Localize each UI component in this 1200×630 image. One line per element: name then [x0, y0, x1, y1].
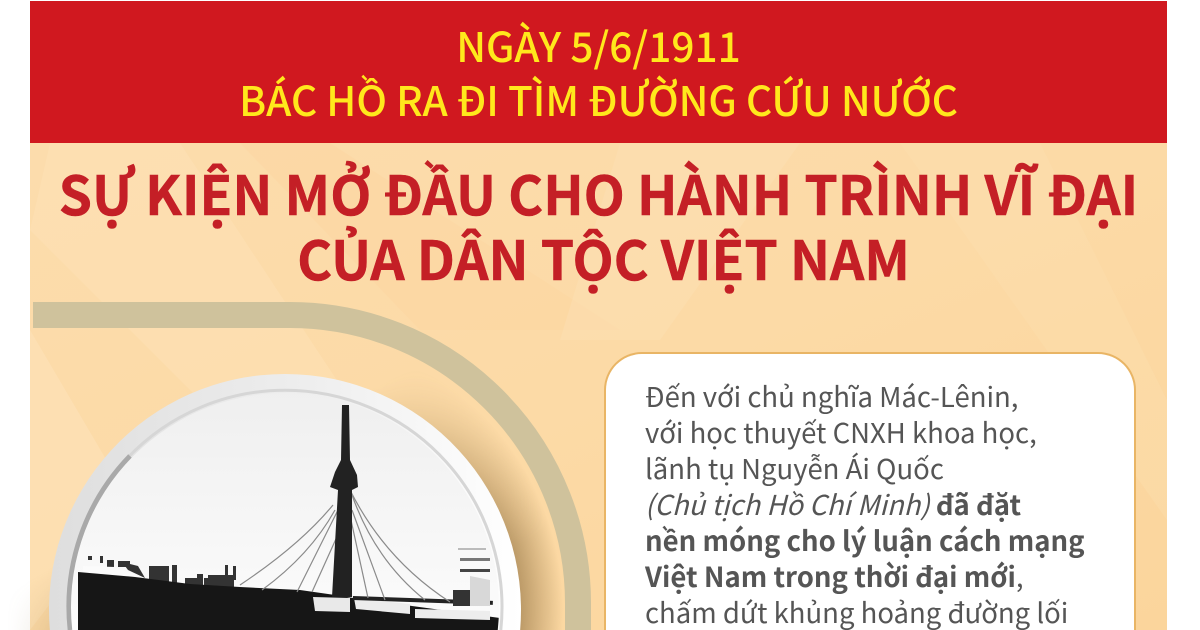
line 5: nền móng cho lý luận cách mạng — [645, 519, 1085, 559]
arc ribbon — [33, 315, 578, 630]
mast — [330, 405, 358, 597]
white circular frame — [49, 374, 521, 630]
distant rigging — [460, 558, 490, 561]
frame shadow — [24, 402, 558, 630]
text card — [604, 352, 1136, 630]
photo: ship in circular frame with arc — [24, 302, 591, 630]
title line 2: CỦA DÂN TỘC VIỆT NAM — [297, 217, 910, 296]
line 3: lãnh tụ Nguyễn Ái Quốc — [645, 447, 944, 487]
shoreline buildings — [88, 556, 236, 588]
title line 1: SỰ KIỆN MỞ ĐẦU CHO HÀNH TRÌNH VĨ ĐẠI — [59, 152, 1138, 231]
line 2: với học thuyết CNXH khoa học, — [645, 411, 1037, 451]
line 4: (Chủ tịch Hồ Chí Minh) đã đặt — [645, 483, 1021, 523]
header band — [30, 1, 1167, 143]
line 6: Việt Nam trong thời đại mới, — [645, 555, 1024, 595]
hull — [78, 572, 500, 630]
dock — [107, 566, 114, 569]
line 7: chấm dứt khủng hoảng đường lối — [645, 591, 1068, 630]
ship photograph — [71, 405, 499, 630]
body text — [645, 380, 1085, 630]
hull lights — [313, 597, 350, 612]
heading: event: BÁC HỒ RA ĐI TÌM ĐƯỜNG CỨU NƯỚC — [239, 68, 958, 128]
title — [59, 152, 1138, 296]
heading: date: NGÀY 5/6/1911 — [456, 14, 741, 74]
photo rim — [68, 390, 502, 630]
rigging — [240, 490, 450, 602]
panel: beige background with rays — [30, 143, 1167, 630]
